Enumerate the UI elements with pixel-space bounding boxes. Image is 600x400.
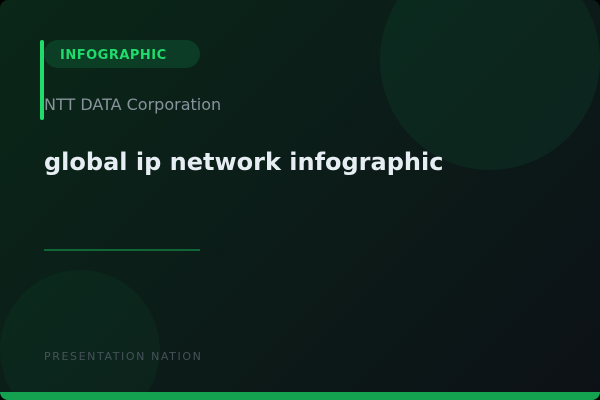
- decorative circle: bottom left: [0, 270, 160, 400]
- badge label: INFOGRAPHIC: [60, 48, 167, 63]
- divider line: [44, 249, 200, 251]
- decorative circle: top right: [380, 0, 600, 170]
- footer label: PRESENTATION NATION: [44, 350, 202, 363]
- title: global ip network infographic: [44, 148, 443, 176]
- company name: NTT DATA Corporation: [44, 95, 221, 114]
- bottom accent bar: [0, 392, 600, 400]
- left accent bar: [40, 40, 44, 120]
- badge pill: [44, 40, 200, 68]
